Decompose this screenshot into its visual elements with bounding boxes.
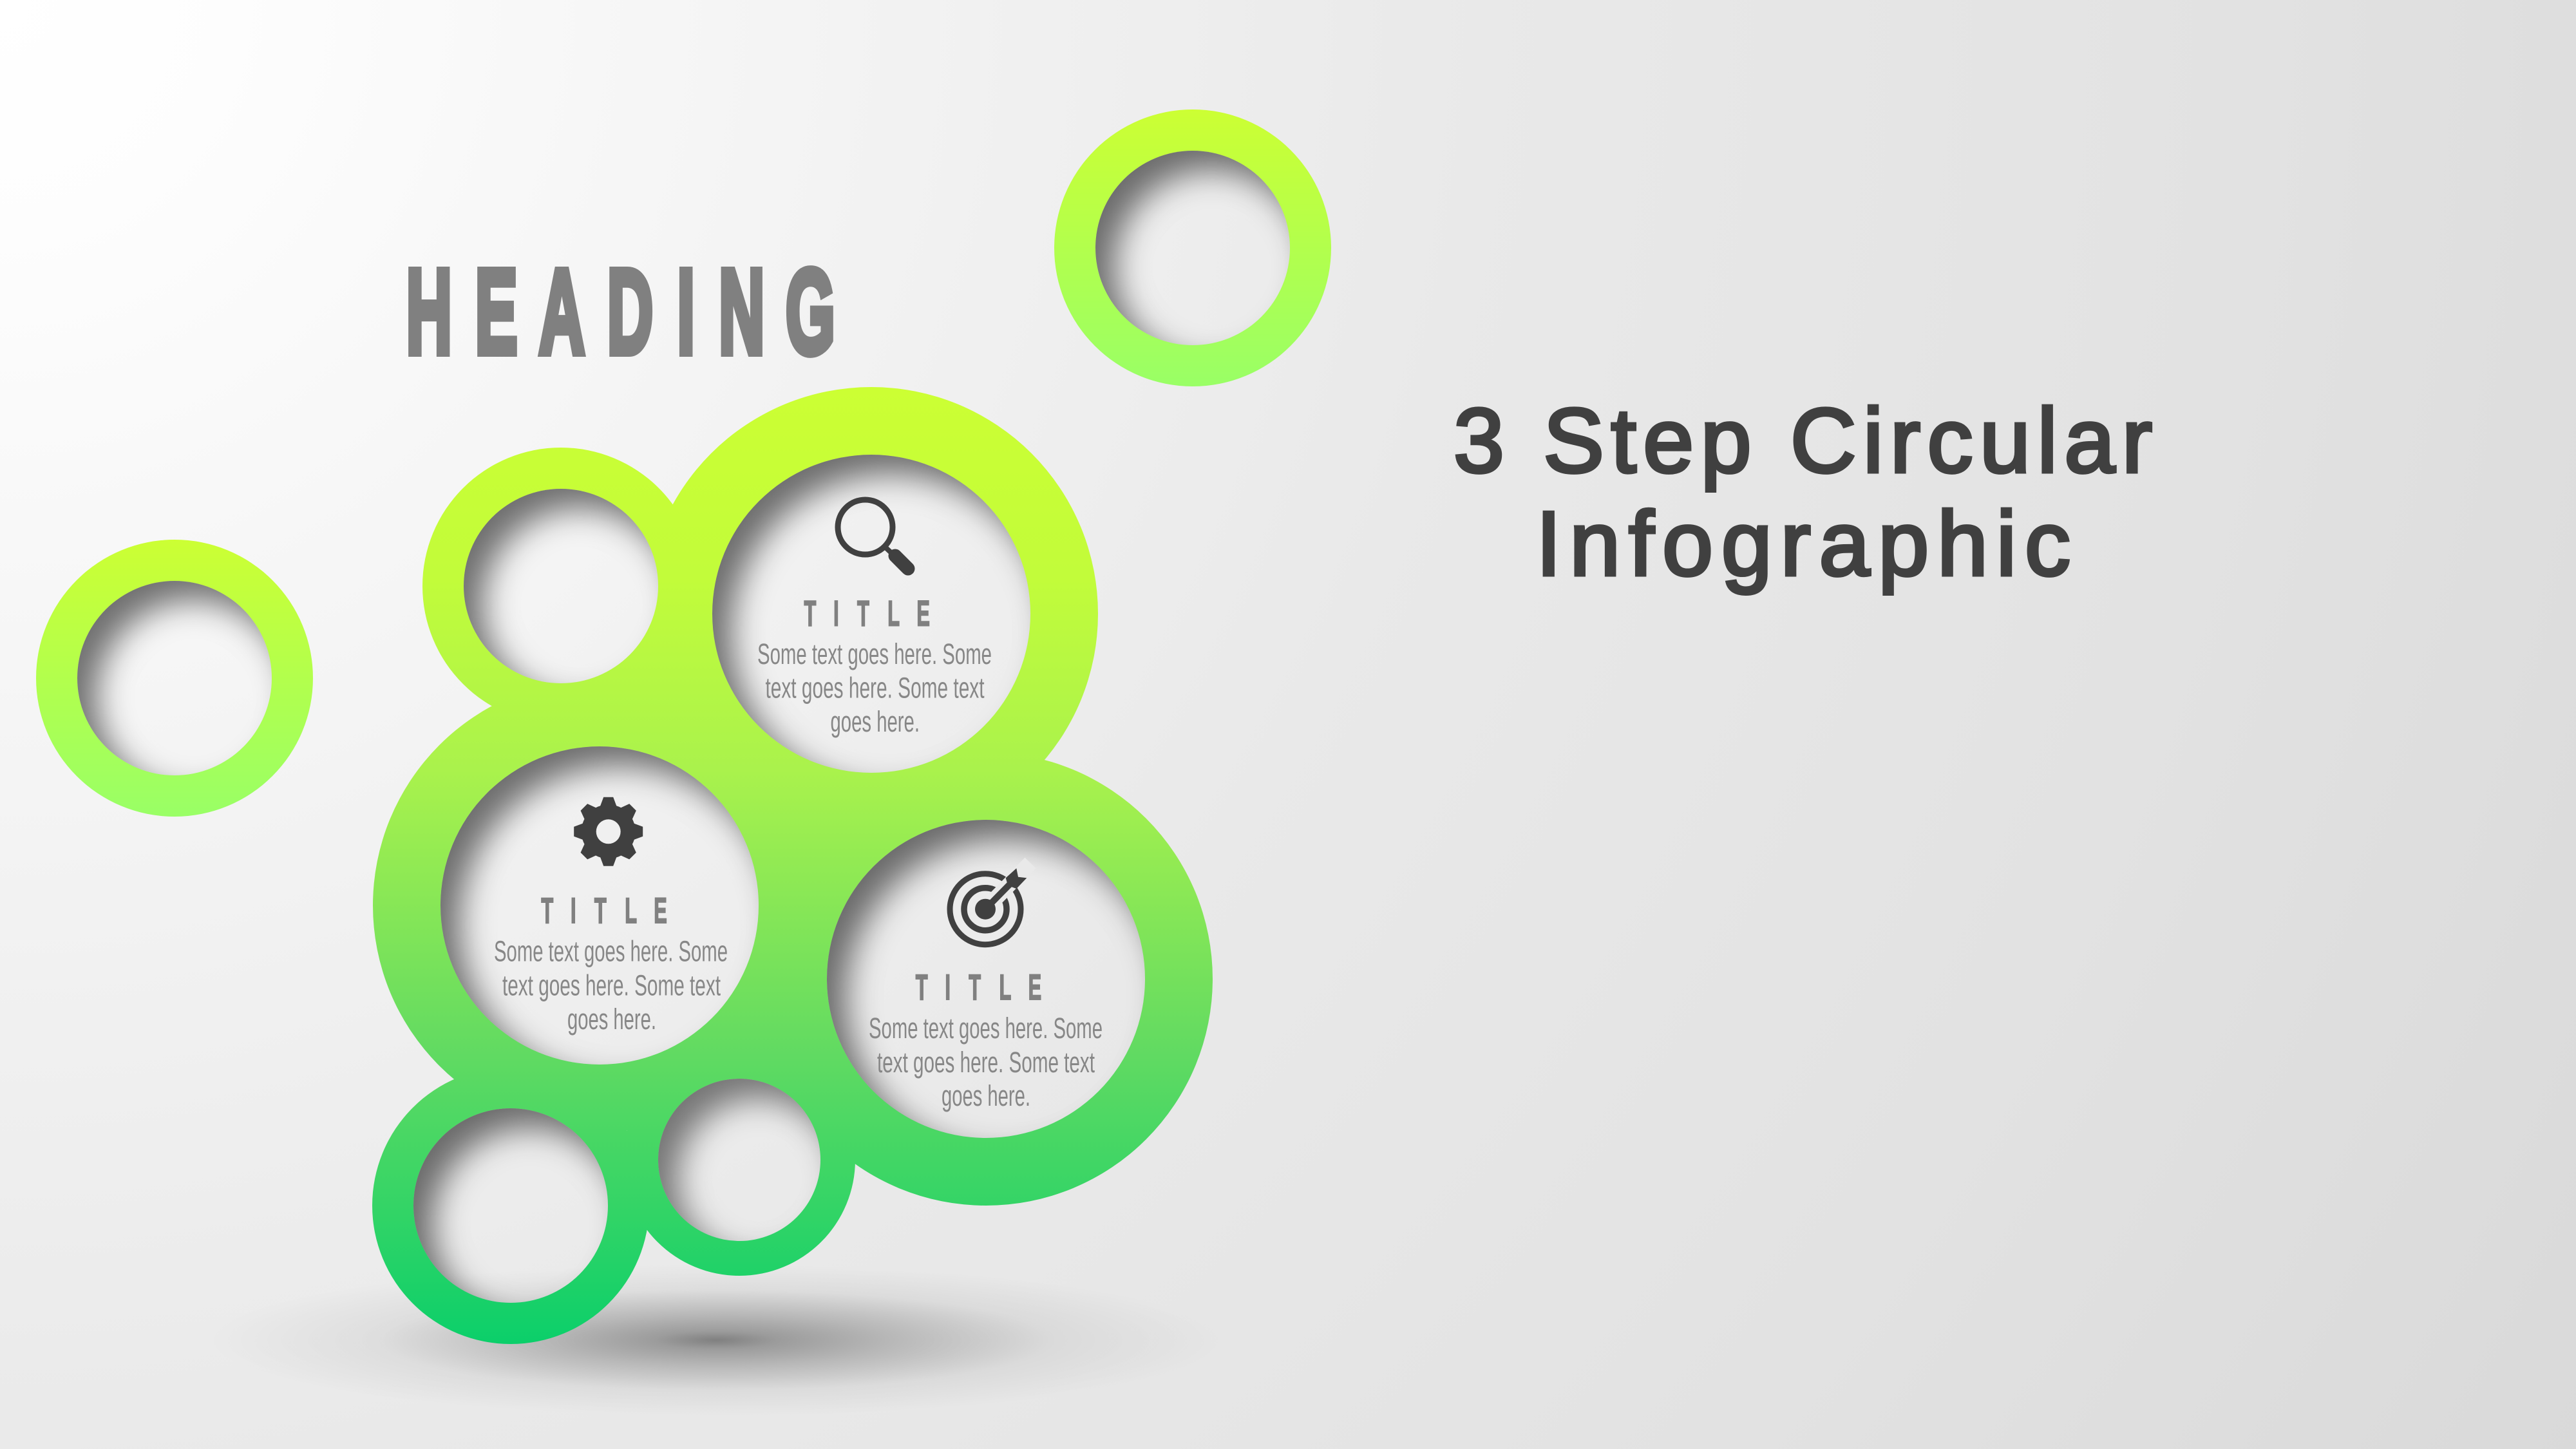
floating ring top right <box>1054 109 1331 386</box>
hole shadow: lower middle small circle <box>658 1079 820 1241</box>
icon: magnifying glass <box>838 500 908 569</box>
step one content <box>757 500 992 738</box>
icon: target with arrow <box>950 863 1030 945</box>
step one text <box>757 638 992 738</box>
step one text: text goes here. Some text <box>765 671 985 705</box>
step three title: TITLE <box>916 967 1041 1007</box>
step one text: goes here. <box>831 705 920 738</box>
hole shadow: step two <box>440 746 759 1065</box>
hole shadow: lower left small circle <box>413 1108 608 1303</box>
step two title: TITLE <box>541 890 667 931</box>
step one title: TITLE <box>804 593 930 634</box>
ground shadow <box>207 1264 1225 1416</box>
circle cluster <box>372 387 1213 1344</box>
step three text: Some text goes here. Some <box>869 1012 1103 1045</box>
heading: HEADING <box>406 244 835 379</box>
step three content <box>869 863 1103 1112</box>
step two content <box>494 797 728 1036</box>
step two text: text goes here. Some text <box>502 969 721 1002</box>
hole shadow: step three <box>827 820 1145 1138</box>
title line 1: 3 Step Circular <box>1454 390 2152 492</box>
step three text: goes here. <box>942 1079 1030 1112</box>
step two text: Some text goes here. Some <box>494 935 728 967</box>
floating ring left <box>36 540 313 817</box>
main title <box>1454 390 2152 595</box>
step three text: text goes here. Some text <box>877 1046 1095 1079</box>
step three text <box>869 1012 1103 1112</box>
green cluster shape <box>372 387 1213 1344</box>
step two text: goes here. <box>567 1003 656 1036</box>
hole shadow: step one <box>712 455 1030 773</box>
title line 2: Infographic <box>1536 493 2070 595</box>
hole shadow: upper small circle <box>464 489 658 683</box>
icon: gear <box>574 797 643 866</box>
step two text <box>494 935 728 1036</box>
step one text: Some text goes here. Some <box>757 638 992 670</box>
